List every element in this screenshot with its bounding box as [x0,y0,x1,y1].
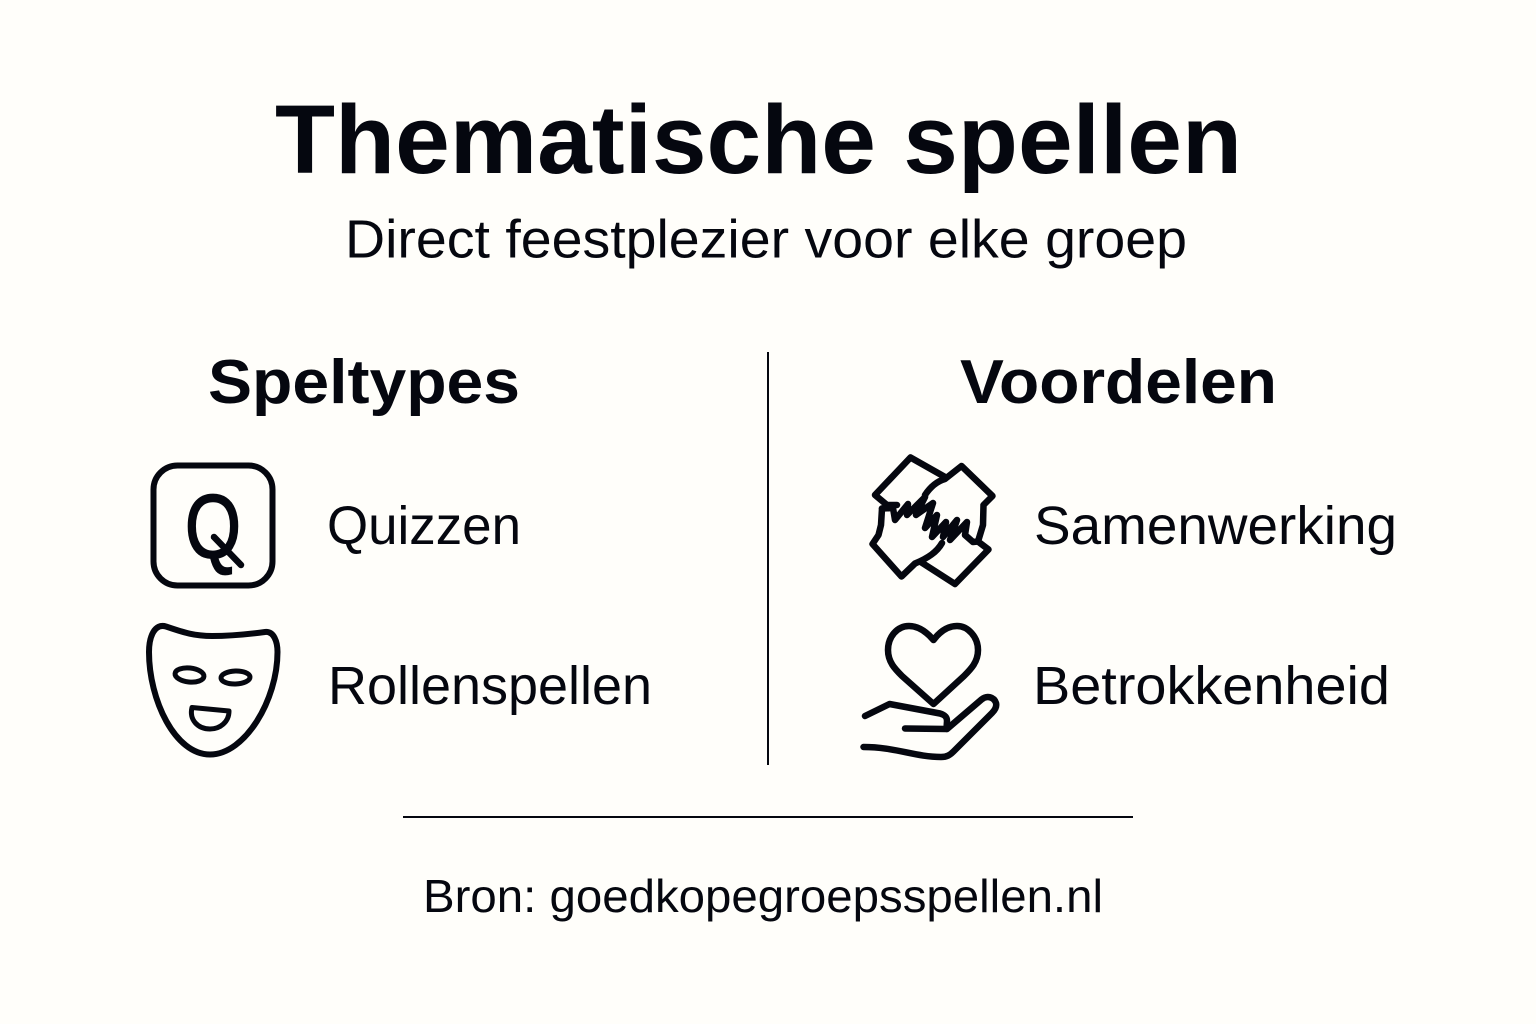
icon: quiz tile with Q: Q [185,478,241,578]
panel: speltypes [149,348,652,754]
footer divider [403,816,1133,818]
label: betrokkenheid: Betrokkenheid [1033,656,1390,716]
icon: quiz tile with Q [154,466,272,586]
label: quizzen: Quizzen [327,496,521,556]
icon: theatre mask [149,626,278,754]
label: samenwerking: Samenwerking [1034,496,1397,556]
title: Thematische spellen [275,85,1242,194]
label: rollenspellen: Rollenspellen [328,656,652,716]
centre divider [767,352,769,765]
source line: Bron: goedkopegroepsspellen.nl [423,870,1103,922]
icon: hand holding heart [864,626,996,757]
heading: voordelen: Voordelen [960,348,1277,417]
panel: voordelen [864,348,1397,757]
icon: clasped hands [872,458,992,584]
heading: speltypes: Speltypes [208,348,520,417]
subtitle: Direct feestplezier voor elke groep [345,210,1187,270]
